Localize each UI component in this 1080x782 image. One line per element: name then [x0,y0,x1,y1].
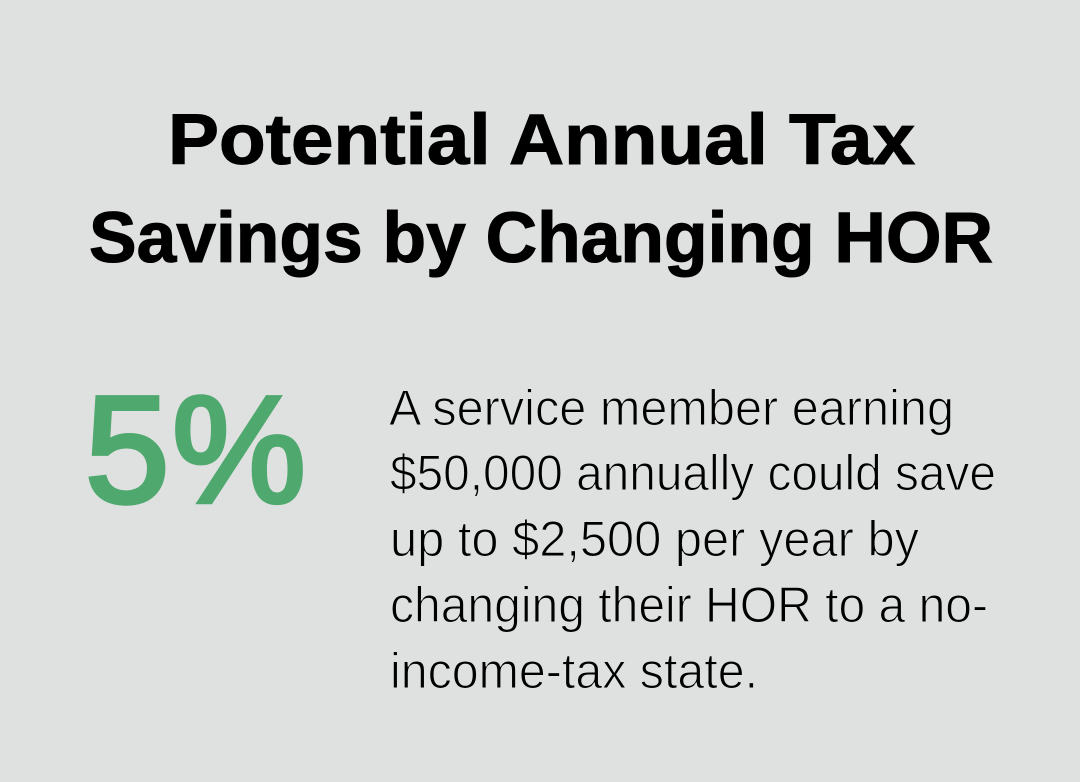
description text: $50,000 annually could save [390,445,996,501]
description text [389,380,996,699]
title: Savings by Changing HOR [89,199,993,278]
description text: income-tax state. [390,643,758,699]
title: Potential Annual Tax [168,101,915,180]
description text: A service member earning [389,380,954,436]
big statistic: 5% [85,365,306,535]
description text: changing their HOR to a no- [390,577,988,633]
description text: up to $2,500 per year by [390,511,919,567]
big statistic: 5%: 5 [85,365,170,535]
big statistic: 5%: % [172,365,306,535]
title [89,101,993,278]
